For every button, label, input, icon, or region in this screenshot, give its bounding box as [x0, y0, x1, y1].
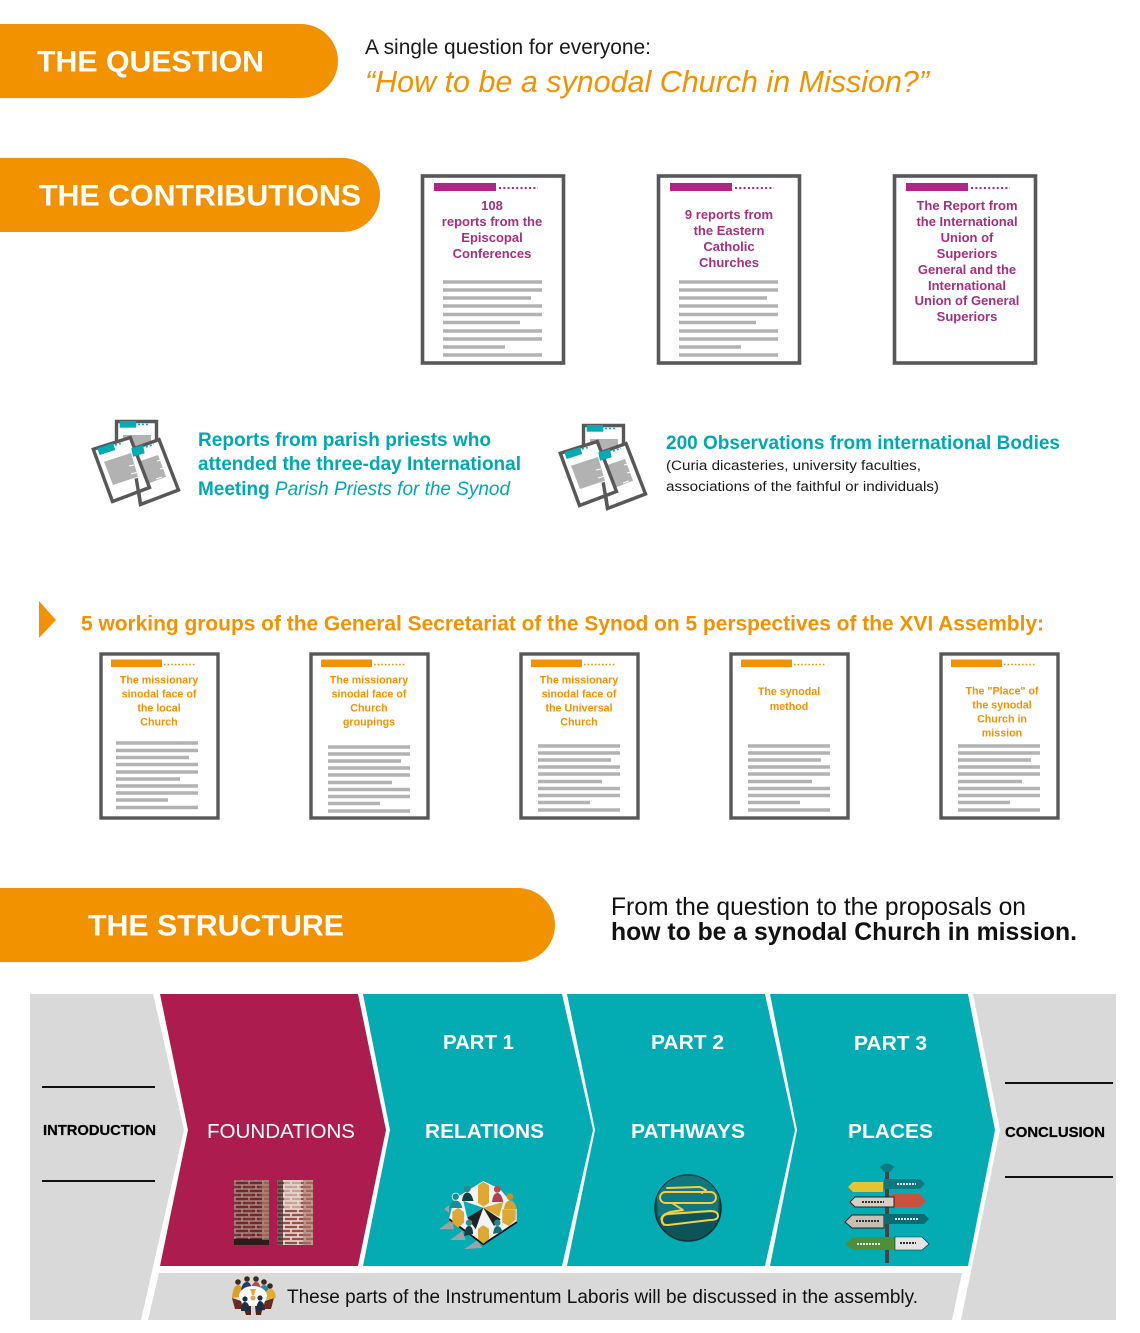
- panel: part 2 pathways: PART 2: [651, 1032, 724, 1054]
- document: Universal Church: sinodal face of: [542, 688, 617, 700]
- header: the structure: [0, 888, 555, 962]
- document: International Union of Superiors General report: [894, 176, 1036, 363]
- panel: foundations: [160, 994, 386, 1266]
- header: the contributions: [0, 158, 380, 232]
- document: International Union of Superiors General report: Superiors: [937, 246, 997, 261]
- document: local Church: Church: [140, 716, 178, 728]
- document: place of the synodal Church: mission: [982, 728, 1022, 740]
- document: Universal Church: [521, 654, 638, 818]
- document: local Church: the local: [137, 702, 181, 714]
- document: Episcopal Conferences reports: Episcopal: [461, 230, 523, 245]
- icon: stacked documents, parish priests: [93, 421, 178, 504]
- header: the structure: THE STRUCTURE: [88, 910, 344, 942]
- document: Universal Church: the Universal: [545, 702, 613, 714]
- structure subtitle: [611, 894, 1077, 946]
- panel: part 3 places: [770, 994, 995, 1266]
- icon: stacked documents, observations: [560, 425, 646, 508]
- document: synodal method: [731, 654, 848, 818]
- panel: assembly note: [148, 1273, 962, 1320]
- arrow: working groups marker: [39, 601, 56, 638]
- panel: conclusion: CONCLUSION: [1005, 1124, 1105, 1141]
- document: place of the synodal Church: the synodal: [972, 700, 1032, 712]
- document: Episcopal Conferences reports: [422, 176, 564, 363]
- panel: foundations: FOUNDATIONS: [207, 1121, 355, 1143]
- document: Eastern Catholic Churches reports: the Eastern: [694, 223, 764, 238]
- document: place of the synodal Church: Church in: [977, 714, 1027, 726]
- text: parish priests reports: attended the three-day International: [198, 454, 521, 475]
- header: the question: [0, 24, 338, 98]
- panel: part 2 pathways: PATHWAYS: [631, 1120, 745, 1143]
- document: International Union of Superiors General report: General and the: [918, 262, 1016, 277]
- panel: part 1 relations: RELATIONS: [425, 1120, 544, 1143]
- panel: part 1 relations: PART 1: [443, 1032, 514, 1054]
- icon: two brick walls: [234, 1180, 313, 1245]
- icon: signpost: [845, 1164, 929, 1263]
- document: Episcopal Conferences reports: 108: [481, 198, 503, 213]
- document: place of the synodal Church: The "Place" of: [965, 686, 1039, 698]
- question text: “How to be a synodal Church in Mission?”: [365, 65, 931, 99]
- document: Eastern Catholic Churches reports: [658, 176, 800, 363]
- panel: part 3 places: PLACES: [848, 1120, 933, 1143]
- document: synodal method: The synodal: [758, 686, 820, 698]
- panel: assembly note: These parts of the Instrumentum Laboris will be discussed in the assembly.: [287, 1287, 918, 1308]
- panel: part 2 pathways: [567, 994, 795, 1266]
- document: International Union of Superiors General report: the International: [916, 214, 1018, 229]
- document: Church groupings: groupings: [343, 716, 395, 728]
- panel: part 3 places: PART 3: [854, 1033, 927, 1055]
- text: observations from international bodies: 200 Observations from international Bodies: [666, 433, 1060, 454]
- document: local Church: The missionary: [120, 674, 198, 686]
- question text: [365, 36, 931, 99]
- text: parish priests reports: Reports from parish priests who: [198, 430, 491, 451]
- header: the question: THE QUESTION: [37, 46, 264, 78]
- panel: part 1 relations: [363, 994, 593, 1266]
- document: Eastern Catholic Churches reports: 9 reports from: [685, 207, 773, 222]
- panel: introduction: INTRODUCTION: [43, 1122, 156, 1139]
- document: local Church: sinodal face of: [122, 688, 197, 700]
- document: Church groupings: Church: [350, 702, 388, 714]
- structure subtitle: From the question to the proposals on: [611, 894, 1026, 921]
- document: Universal Church: The missionary: [540, 674, 618, 686]
- text: parish priests reports: [198, 430, 521, 500]
- document: International Union of Superiors General report: Union of General: [915, 293, 1019, 308]
- document: synodal method: method: [770, 701, 808, 713]
- icon: winding path in a circle: [655, 1175, 721, 1241]
- document: Eastern Catholic Churches reports: Churches: [699, 255, 759, 270]
- structure subtitle: how to be a synodal Church in mission.: [611, 919, 1077, 946]
- document: Eastern Catholic Churches reports: Catholic: [703, 239, 755, 254]
- text: parish priests reports: Meeting Parish Priests for the Synod: [198, 479, 511, 500]
- text: observations from international bodies: [666, 433, 1060, 495]
- document: Episcopal Conferences reports: Conferences: [453, 246, 531, 261]
- document: Universal Church: Church: [560, 716, 598, 728]
- document: Church groupings: sinodal face of: [332, 688, 407, 700]
- document: Episcopal Conferences reports: reports from the: [442, 214, 542, 229]
- document: International Union of Superiors General report: International: [928, 278, 1006, 293]
- document: place of the synodal Church: [941, 654, 1058, 818]
- panel: introduction: [30, 994, 184, 1320]
- text: observations from international bodies: (Curia dicasteries, university faculties,: [666, 458, 921, 474]
- icon: people around a shared wheel: [439, 1181, 517, 1249]
- document: Church groupings: [311, 654, 428, 818]
- question text: A single question for everyone:: [365, 36, 651, 59]
- text: observations from international bodies: associations of the faithful or individuals): [666, 479, 939, 495]
- header: the contributions: THE CONTRIBUTIONS: [39, 180, 361, 212]
- heading: working groups: 5 working groups of the General Secretariat of the Synod on 5 perspectives of the XVI Assembly:: [81, 612, 1044, 636]
- icon: people at a round table: [232, 1276, 276, 1315]
- document: International Union of Superiors General report: Union of: [941, 230, 994, 245]
- panel: conclusion: [961, 994, 1116, 1320]
- document: Church groupings: The missionary: [330, 674, 408, 686]
- document: International Union of Superiors General report: Superiors: [937, 309, 997, 324]
- document: local Church: [101, 654, 218, 818]
- document: International Union of Superiors General report: The Report from: [916, 198, 1018, 213]
